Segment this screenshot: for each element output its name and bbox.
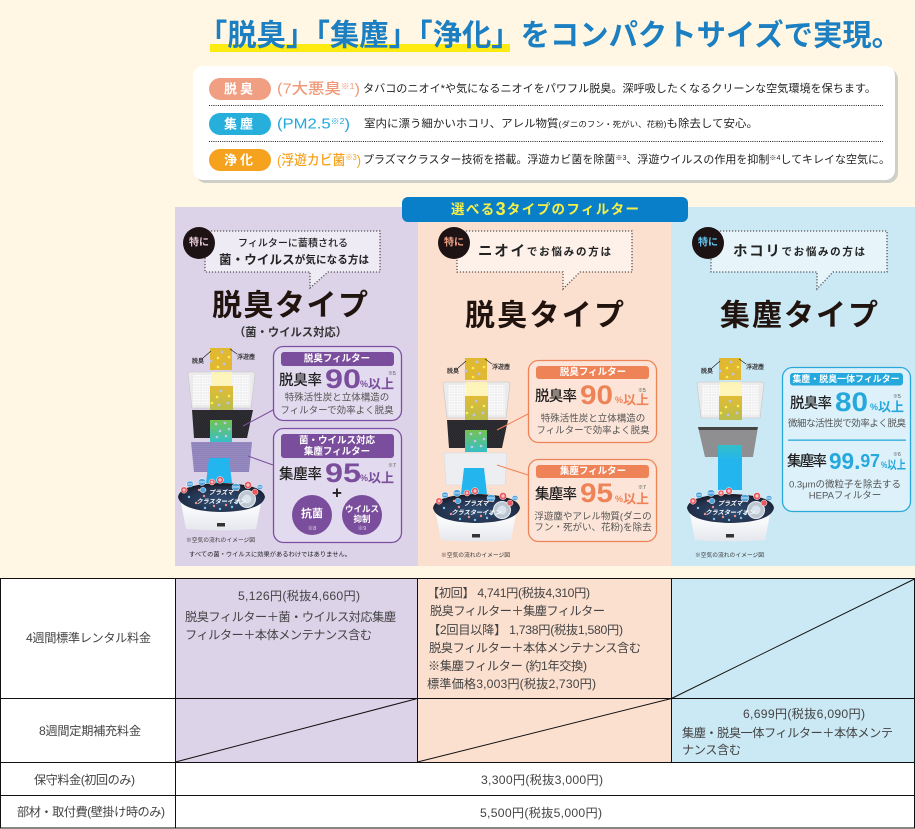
illustration: purifier: 脱臭: [192, 357, 204, 365]
row labels: 保守料金(初回のみ): [34, 773, 135, 787]
peach column prices: 脱臭フィルター＋集塵フィルター: [430, 603, 605, 618]
speech bubble: 特に: [444, 236, 464, 248]
row: 浄化: プラズマクラスター技術を搭載。浮遊カビ菌を除菌: [363, 154, 611, 166]
filter box: integrated: 脱臭率: [790, 395, 832, 412]
row: 脱臭: ※1: [341, 82, 355, 90]
row: 浄化: ※3: [615, 154, 627, 162]
speech bubble: 特に: [698, 236, 718, 248]
filter box: integrated: HEPAフィルター: [809, 490, 881, 502]
illustration: purifier: プラズマ: [209, 488, 234, 496]
illustration: purifier: [178, 348, 265, 530]
filter box: antibacterial dust: 集塵率: [279, 466, 322, 483]
speech bubble: [183, 227, 380, 288]
speech bubble: [438, 227, 632, 289]
peach column prices: 標準価格3,003円(税抜2,730円): [427, 676, 596, 691]
filter box: deodorizing: 90: [325, 364, 361, 394]
filter box: dust: %以上: [615, 492, 649, 506]
row: 集塵: [209, 113, 758, 135]
filter box: antibacterial dust: [274, 428, 402, 542]
badge: virus suppression: ※9: [358, 525, 366, 532]
purple column prices: 5,126円(税抜4,660円): [238, 589, 360, 603]
row: 集塵: ※2: [331, 116, 345, 126]
speech bubble: ホコリでお悩みの方は: [733, 243, 866, 260]
illustration: purifier: クラスターイオン: [705, 508, 755, 516]
panel: blue background: [671, 207, 915, 566]
filter box: antibacterial dust: 95: [325, 458, 361, 488]
filter box: deodorizing: 脱臭率: [279, 372, 322, 389]
filter box: integrated: ※6: [893, 452, 901, 458]
filter box: integrated: 微細な活性炭で効率よく脱臭: [788, 418, 906, 430]
illustration: purifier: 浮遊塵: [237, 353, 255, 361]
heading: 集塵タイプ: [720, 300, 878, 332]
filter box: integrated: 80: [835, 387, 868, 417]
filter box: deodorizing: ※5: [638, 388, 646, 394]
blue column prices: [682, 707, 893, 757]
blue column prices: ナンス含む: [682, 743, 741, 757]
filter box: deodorizing: %以上: [360, 376, 394, 392]
row: 浄化: (浮遊カビ菌: [277, 152, 352, 168]
row: 脱臭: タバコのニオイ*や気になるニオイをパワフル脱臭。深呼吸したくなるクリーンな空気環境を保ちます。: [363, 81, 876, 95]
filter box: integrated: 99.97: [829, 448, 880, 474]
badge: virus suppression: ウイルス: [345, 504, 379, 514]
filter box: deodorizing: ※5: [388, 371, 396, 377]
filter box: deodorizing: 90: [580, 380, 613, 410]
filter box: integrated: %以上: [870, 400, 904, 414]
filter box: deodorizing: フィルターで効率よく脱臭: [280, 404, 394, 416]
filter box: dust: [528, 460, 656, 542]
banner: choose three filter types: 選べる3タイプのフィルター: [451, 199, 639, 219]
installation fee: 5,500円(税抜5,000円): [480, 806, 602, 820]
row labels: 8週間定期補充料金: [39, 724, 141, 738]
row labels: 4週間標準レンタル料金: [26, 630, 151, 645]
connector lines: [243, 410, 273, 465]
panel: peach background: [418, 207, 671, 566]
speech bubble: [692, 227, 887, 289]
filter box: antibacterial dust: ※7: [388, 463, 396, 469]
filter box: integrated: 集塵・脱臭一体フィルター: [792, 373, 900, 384]
row: 脱臭: [209, 78, 876, 100]
filter box: antibacterial dust: 集塵フィルター: [304, 446, 370, 458]
peach column prices: 【初回】 4,741円(税抜4,310円): [427, 586, 590, 600]
filter box: integrated: 0.3μmの微粒子を除去する: [789, 478, 901, 490]
illustration: purifier: 脱臭: [447, 367, 459, 375]
banner: choose three filter types: [402, 197, 688, 222]
filter box: deodorizing: 特殊活性炭と立体構造の: [541, 412, 645, 424]
row: 浄化: [209, 149, 890, 171]
filter box: antibacterial dust: +: [332, 484, 342, 502]
row: 集塵: 室内に漂う細かいホコリ、アレル物質 (ダニのフン・死がい、花粉) も除去して安心。: [364, 116, 758, 130]
blue column prices: 集塵・脱臭一体フィルター＋本体メンテ: [682, 725, 893, 740]
filter box: deodorizing: フィルターで効率よく脱臭: [536, 424, 650, 436]
pricing table: [0, 578, 914, 828]
speech bubble: フィルターに蓄積される: [238, 236, 348, 250]
row: 浄化: ※4: [769, 154, 781, 162]
row: 浄化: ※3: [345, 152, 357, 162]
blue column prices: 6,699円(税抜6,090円): [743, 707, 865, 721]
row: 浄化: してキレイな空気に。: [780, 152, 890, 166]
speech bubble: 特に: [189, 236, 209, 248]
title: 「脱臭」「集塵」「浄化」をコンパクトサイズで実現。: [198, 18, 901, 52]
filter box: dust: 95: [580, 478, 613, 508]
filter box: dust: 集塵率: [535, 486, 577, 503]
peach column prices: [427, 586, 641, 691]
filter box: deodorizing: [274, 346, 402, 420]
row: 集塵: ): [344, 116, 350, 132]
row labels: [17, 630, 165, 819]
peach column prices: 脱臭フィルター＋本体メンテナンス含む: [429, 640, 641, 655]
row: 脱臭: (7大悪臭: [277, 80, 335, 98]
badge: antibacterial: 抗菌: [301, 506, 323, 520]
heading: 脱臭タイプ: [212, 290, 368, 322]
row: 脱臭: 脱臭: [224, 82, 256, 96]
badge: virus suppression: 抑制: [353, 514, 371, 524]
badge: antibacterial: [292, 495, 332, 535]
filter box: antibacterial dust: %以上: [360, 470, 394, 486]
note: すべての菌・ウイルスに効果があるわけではありません。: [189, 550, 351, 558]
illustration: purifier: プラズマ: [464, 500, 489, 508]
row: 浄化: ): [357, 152, 361, 168]
panel: deodorizing type (virus): [178, 227, 402, 558]
caption: ※空気の流れのイメージ図: [695, 551, 764, 559]
filter box: dust: 浮遊塵やアレル物質(ダニの: [534, 510, 652, 522]
illustration: purifier: 浮遊塵: [492, 363, 510, 371]
row: 集塵: 集塵: [224, 116, 256, 132]
maintenance fee: 3,300円(税抜3,000円): [481, 773, 603, 787]
caption: ※空気の流れのイメージ図: [186, 536, 255, 544]
row: 浄化: 、浮遊ウイルスの作用を抑制: [626, 152, 770, 166]
filter box: deodorizing: 脱臭率: [535, 388, 577, 405]
row: 脱臭: ): [355, 80, 360, 98]
panel: three functions: [193, 66, 898, 183]
filter box: dust: フン・死がい、花粉)を除去: [534, 522, 652, 534]
illustration: purifier: 浮遊塵: [746, 363, 764, 371]
filter box: dust: ※7: [638, 485, 646, 491]
filter box: deodorizing: [528, 360, 656, 442]
row labels: 部材・取付費(壁掛け時のみ): [17, 804, 165, 819]
subheading: （菌・ウイルス対応）: [234, 325, 347, 339]
illustration: purifier: [433, 358, 520, 542]
badge: antibacterial: ※8: [308, 525, 316, 532]
caption: ※空気の流れのイメージ図: [441, 551, 510, 559]
speech bubble: ニオイでお悩みの方は: [478, 243, 612, 260]
row: 集塵: (PM2.5: [277, 116, 325, 132]
filter box: integrated: [782, 368, 910, 512]
illustration: purifier: クラスターイオン: [196, 498, 246, 506]
purple column prices: フィルター＋本体メンテナンス含む: [185, 628, 372, 642]
purple column prices: 脱臭フィルター＋菌・ウイルス対応集塵: [185, 609, 396, 624]
connector lines: [497, 414, 528, 475]
speech bubble: 菌・ウイルスが気になる方は: [219, 252, 370, 267]
illustration: purifier: プラズマ: [718, 500, 743, 508]
row: 浄化: 浄化: [224, 152, 256, 168]
panel: deodorizing type: [433, 227, 656, 559]
filter box: deodorizing: 特殊活性炭と立体構造の: [285, 392, 389, 404]
illustration: purifier: クラスターイオン: [451, 508, 501, 516]
filter box: integrated: %以上: [881, 458, 906, 472]
peach column prices: 【2回目以降】 1,738円(税抜1,580円): [428, 623, 623, 637]
filter box: antibacterial dust: 菌・ウイルス対応: [299, 434, 375, 446]
illustration: purifier: [687, 358, 774, 542]
purple column prices: [185, 589, 396, 642]
filter box: deodorizing: 脱臭フィルター: [304, 352, 370, 364]
panel: purple background: [175, 207, 418, 566]
illustration: purifier: 脱臭: [701, 367, 713, 375]
filter box: integrated: ※5: [893, 394, 901, 400]
badge: virus suppression: [342, 495, 382, 535]
filter box: dust: 集塵フィルター: [560, 465, 626, 477]
peach column prices: ※集塵フィルター (約1年交換): [428, 658, 587, 673]
panel: dust collection type: [687, 227, 910, 559]
filter box: integrated: 集塵率: [787, 453, 827, 470]
filter box: deodorizing: %以上: [615, 392, 649, 408]
filter box: deodorizing: 脱臭フィルター: [560, 366, 626, 378]
heading: 脱臭タイプ: [465, 300, 624, 332]
